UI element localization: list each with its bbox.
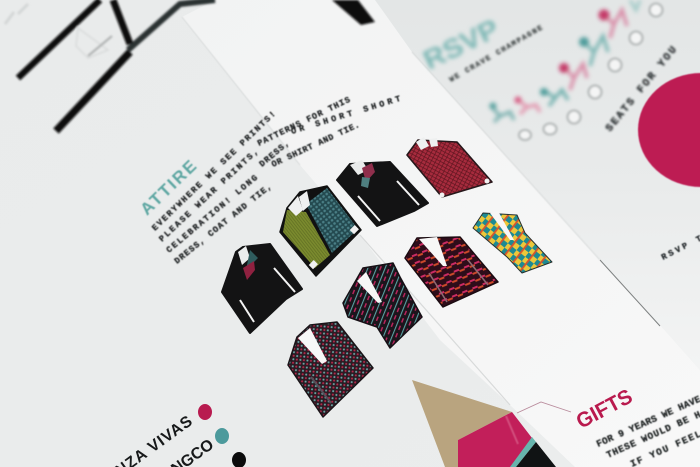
map lines bbox=[5, 0, 375, 131]
attire text block: PATTERNS FOR THIS bbox=[256, 95, 352, 149]
heading: gifts: GIFTS bbox=[573, 385, 636, 433]
jacket 6: stripes bbox=[343, 263, 422, 348]
rsvp subtitle: WE CRAVE CHAMPAGNE bbox=[448, 24, 545, 85]
attire text block: DRESS, COAT AND TIE, bbox=[173, 182, 274, 266]
gifts text block: FOR 9 YEARS WE HAVE bbox=[595, 394, 700, 450]
attire text block bbox=[150, 94, 402, 266]
heading: attire: ATTIRE bbox=[137, 157, 200, 219]
gifts text block: THESE WOULD BE H bbox=[605, 409, 700, 461]
attire text block: OR SHIRT AND TIE. bbox=[270, 120, 361, 170]
attire text block: PLEASE WEAR PRINTS, bbox=[157, 147, 261, 244]
attire text block: CELEBRATION! LONG bbox=[165, 173, 260, 255]
jacket 5: dotted bbox=[288, 322, 373, 417]
jacket 1: black bbox=[222, 244, 302, 333]
seats for you label: SEATS FOR YOU bbox=[604, 45, 680, 135]
jacket 2: green and blue bbox=[280, 186, 361, 276]
crimson circle bbox=[638, 73, 700, 187]
jacket 4: red check bbox=[407, 137, 492, 198]
attire text block: EVERYWHERE WE SEE PRINTS! bbox=[150, 109, 278, 233]
attire text block: DRESS, bbox=[258, 138, 292, 169]
connector line bbox=[517, 402, 571, 413]
seat chairs bbox=[490, 0, 640, 122]
colour graphic bottom bbox=[412, 380, 556, 467]
seat circles bbox=[519, 4, 662, 140]
attire text block: OR SHORT SHORT bbox=[290, 94, 402, 137]
jacket 8: colourful check bbox=[473, 211, 552, 273]
jacket 7: red and orange wave bbox=[405, 237, 498, 307]
legend dots bbox=[198, 404, 246, 467]
heading: rsvp: RSVP bbox=[418, 13, 504, 75]
jacket 3: black with flower bbox=[337, 160, 428, 226]
